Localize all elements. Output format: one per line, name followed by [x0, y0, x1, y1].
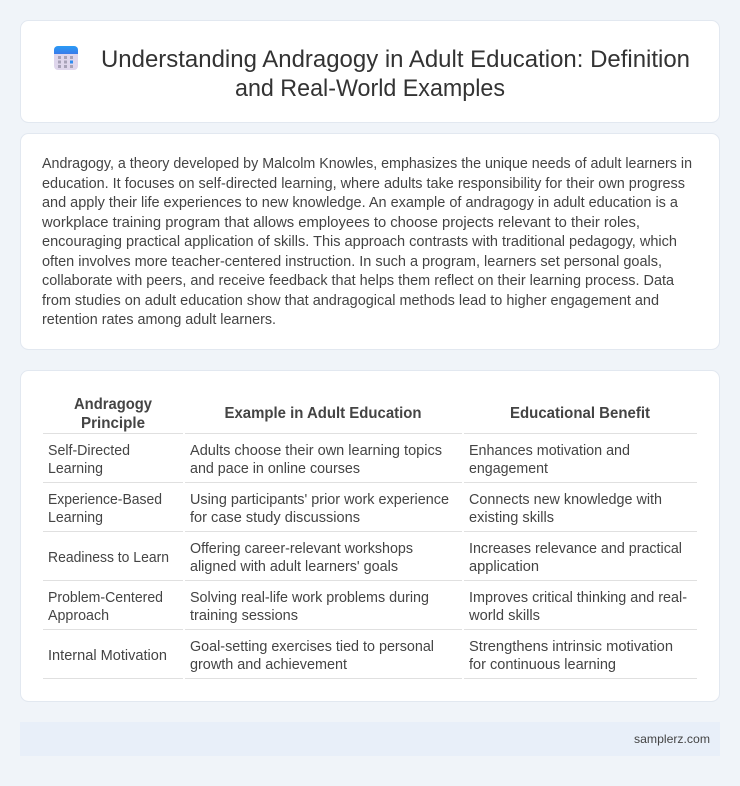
- text block: andragogy description: and apply their life experiences to new knowledge. An example of andragogy in adult education is a: [42, 195, 678, 211]
- table row: internal motivation: for continuous learning: [469, 657, 616, 673]
- table row: readiness to learn: application: [469, 559, 539, 575]
- table row: problem-centered approach: Approach: [48, 608, 109, 624]
- text block: andragogy description: from studies on adult education show that andragogical methods lead to higher engagement and: [42, 293, 659, 309]
- table row: readiness to learn: Readiness to Learn: [48, 550, 169, 566]
- table header: Principle: [81, 415, 145, 432]
- table row: self-directed learning: Self-Directed: [48, 443, 130, 459]
- table row: readiness to learn: [48, 541, 682, 575]
- table header: Educational Benefit: [510, 405, 651, 422]
- table row: experience-based learning: [48, 492, 662, 526]
- table row: self-directed learning: Adults choose their own learning topics: [190, 443, 442, 459]
- table row: problem-centered approach: Solving real-life work problems during: [190, 590, 429, 606]
- table row: experience-based learning: for case study discussions: [190, 510, 360, 526]
- table row: readiness to learn: Offering career-relevant workshops: [190, 541, 413, 557]
- panel: header: [20, 20, 720, 122]
- table row: experience-based learning: Connects new knowledge with: [469, 492, 662, 508]
- table row: problem-centered approach: training sessions: [190, 608, 298, 624]
- text block: andragogy description: encouraging practical application of skills. This approach contrasts with traditional pedagogy, which: [42, 234, 677, 250]
- table row: self-directed learning: and pace in online courses: [190, 461, 360, 477]
- footer: samplerz.com: [634, 732, 710, 746]
- table header: Andragogy: [74, 396, 152, 413]
- table row: experience-based learning: Using participants' prior work experience: [190, 492, 449, 508]
- title: Understanding Andragogy in Adult Education: Definition: [101, 46, 690, 73]
- text block: andragogy description: [41, 156, 692, 328]
- icon: calendar: [54, 46, 78, 70]
- table row: self-directed learning: engagement: [469, 461, 548, 477]
- table row: internal motivation: Internal Motivation: [48, 648, 167, 664]
- text block: andragogy description: education. It focuses on self-directed learning, where adults take responsibility for their own progress: [42, 176, 685, 192]
- title: and Real-World Examples: [235, 75, 505, 102]
- table row: readiness to learn: Increases relevance and practical: [469, 541, 682, 557]
- table header: [74, 396, 651, 432]
- table row: problem-centered approach: Problem-Centered: [48, 590, 163, 606]
- table row: readiness to learn: aligned with adult learners' goals: [190, 559, 398, 575]
- table row: experience-based learning: Learning: [48, 510, 103, 526]
- table row: self-directed learning: Enhances motivation and: [469, 443, 630, 459]
- table row: problem-centered approach: [48, 590, 687, 624]
- text block: andragogy description: workplace training program that allows employees to choose projects relevant to their roles,: [41, 215, 640, 231]
- table row: experience-based learning: existing skills: [469, 510, 554, 526]
- table row: internal motivation: [48, 639, 673, 673]
- text block: andragogy description: often involves more teacher-centered instruction. In such a program, learners set personal goals,: [42, 254, 662, 270]
- panel: table: [20, 370, 720, 702]
- panel: description: [20, 134, 720, 350]
- title: [101, 46, 690, 102]
- table row: internal motivation: growth and achievement: [190, 657, 347, 673]
- text block: andragogy description: collaborate with peers, and receive feedback that helps them reflect on their learning process. Data: [42, 273, 674, 289]
- table header: Example in Adult Education: [224, 405, 422, 422]
- table row: experience-based learning: Experience-Based: [48, 492, 162, 508]
- table row: internal motivation: Strengthens intrinsic motivation: [469, 639, 673, 655]
- table row: internal motivation: Goal-setting exercises tied to personal: [190, 639, 434, 655]
- text block: andragogy description: Andragogy, a theory developed by Malcolm Knowles, emphasizes the unique needs of adult learners in: [42, 156, 692, 172]
- text block: andragogy description: retention rates among adult learners.: [42, 312, 276, 328]
- table row: self-directed learning: [48, 443, 630, 477]
- table row: problem-centered approach: world skills: [468, 608, 540, 624]
- table row: self-directed learning: Learning: [48, 461, 103, 477]
- table row: problem-centered approach: Improves critical thinking and real-: [469, 590, 687, 606]
- footer: [20, 722, 720, 756]
